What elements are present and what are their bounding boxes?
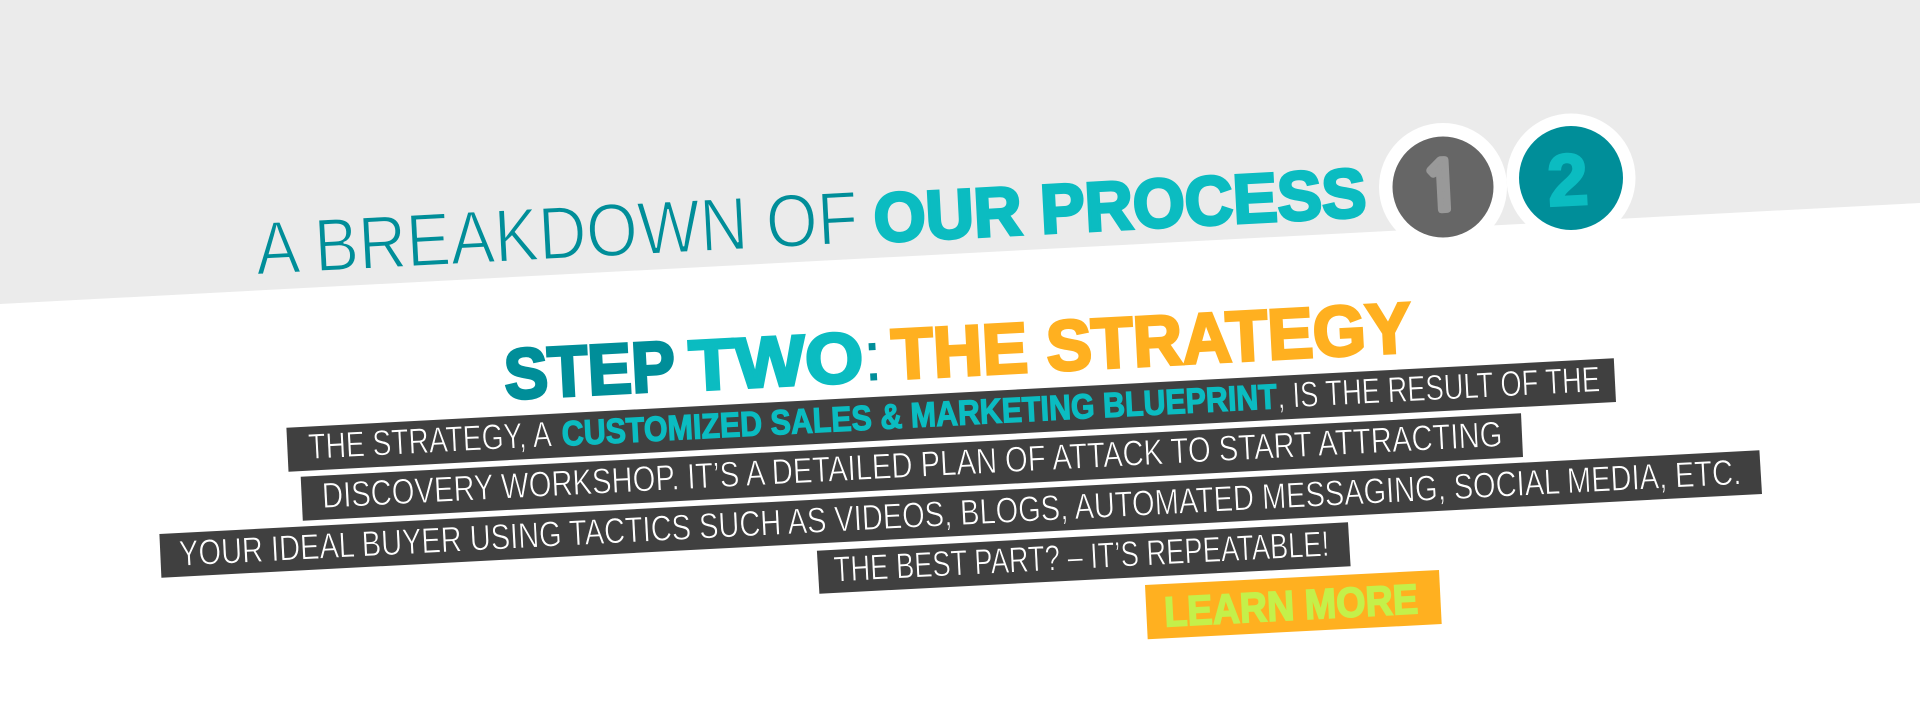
- description line 1: , IS THE RESULT OF THE: [1276, 358, 1601, 416]
- title: a breakdown of our process: [253, 154, 1368, 291]
- description line 2: [301, 413, 1523, 521]
- heading colon: :: [861, 317, 885, 397]
- heading: step two the strategy: [502, 289, 1413, 415]
- title bold part: OUR PROCESS: [872, 154, 1368, 257]
- description line 1: THE STRATEGY, A: [307, 413, 553, 467]
- highlighted phrase: CUSTOMIZED SALES & MARKETING BLUEPRINT: [561, 377, 1278, 454]
- description line 2: DISCOVERY WORKSHOP. IT’S A DETAILED PLAN OF ATTACK TO START ATTRACTING: [321, 413, 1503, 516]
- description line 4: THE BEST PART? – IT’S REPEATABLE!: [833, 523, 1330, 590]
- heading word: step: STEP: [502, 327, 677, 415]
- heading: the strategy: THE STRATEGY: [890, 289, 1413, 395]
- title light part: A BREAKDOWN OF: [253, 175, 860, 291]
- step 1 number: 1: [1420, 153, 1464, 221]
- step 1 badge: [1379, 123, 1507, 251]
- description line 1: [286, 358, 1616, 472]
- learn more button: LEARN MORE: [1163, 575, 1419, 635]
- description line 4: [817, 522, 1351, 594]
- heading word: two: TWO: [687, 318, 865, 406]
- step 2 badge: [1506, 114, 1636, 242]
- grey angled header background: [0, 0, 1920, 304]
- step 2 number: 2: [1545, 139, 1590, 222]
